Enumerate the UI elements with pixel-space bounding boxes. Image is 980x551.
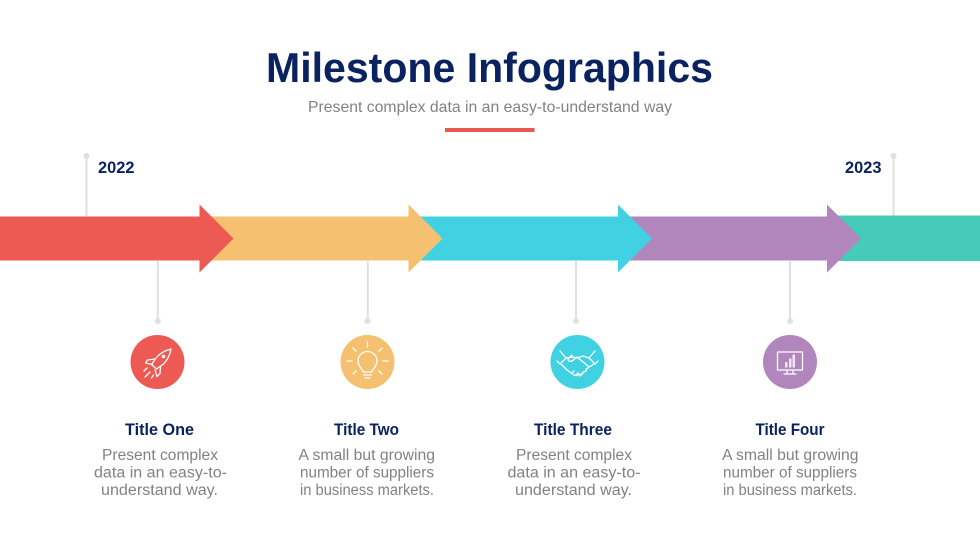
body two: in business markets. <box>300 482 434 499</box>
title: Milestone Infographics <box>266 44 713 91</box>
body three: Present complex <box>516 447 632 464</box>
subtitle: Present complex data in an easy-to-understand way <box>308 99 672 116</box>
title one: Title One <box>125 420 194 439</box>
milestone four <box>722 261 858 499</box>
start year marker 2022: 2022 <box>98 159 134 177</box>
body three: data in an easy-to- <box>508 464 640 482</box>
body two: A small but growing <box>298 447 435 464</box>
title three: Title Three <box>534 420 612 439</box>
title accent line <box>445 128 534 132</box>
body four: A small but growing <box>722 447 858 464</box>
segment: green band <box>830 216 980 261</box>
title four: Title Four <box>756 420 825 439</box>
icon: handshake <box>550 335 604 389</box>
body four <box>722 447 858 499</box>
milestone one <box>94 261 227 499</box>
milestone three <box>508 261 640 499</box>
icon: light bulb <box>340 335 394 389</box>
connector four <box>787 261 793 324</box>
title two: Title Two <box>334 420 399 439</box>
body four: number of suppliers <box>723 464 857 482</box>
body one: data in an easy-to- <box>94 464 227 482</box>
connector two <box>364 261 370 324</box>
arrow: cyan <box>410 204 652 272</box>
arrow: red <box>0 204 234 272</box>
connector three <box>573 261 579 324</box>
start year marker 2022 <box>84 153 134 216</box>
body two <box>298 447 435 499</box>
icon: rocket <box>130 335 184 389</box>
timeline arrows <box>0 204 980 272</box>
body two: number of suppliers <box>300 464 434 482</box>
end year marker 2023 <box>845 153 896 216</box>
connector one <box>155 261 161 324</box>
body one: understand way. <box>101 482 218 499</box>
body three: understand way. <box>515 482 632 499</box>
body four: in business markets. <box>723 482 857 499</box>
body three <box>508 447 640 499</box>
arrow: orange <box>200 204 442 272</box>
icon: monitor chart <box>763 335 817 389</box>
body one <box>94 447 227 499</box>
arrow: purple <box>620 204 861 272</box>
milestone two <box>298 261 435 499</box>
body one: Present complex <box>102 447 218 464</box>
end year marker 2023: 2023 <box>845 159 882 177</box>
